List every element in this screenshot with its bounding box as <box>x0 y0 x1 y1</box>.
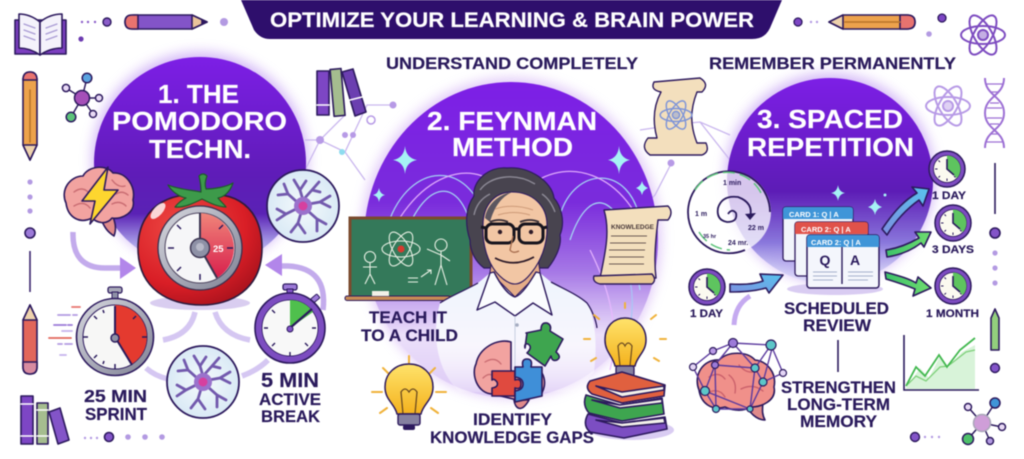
icon: chalkboard <box>345 218 471 300</box>
label: 3 days: 3 DAYS <box>932 244 974 256</box>
arrow: to 1 month <box>885 272 931 296</box>
decorative dots: top right <box>794 14 946 37</box>
label: strengthen long-term memory <box>781 378 896 431</box>
panel: section 3 circle <box>727 78 933 284</box>
icon: 5 minute stopwatch <box>255 284 325 363</box>
icon: flashcards: A <box>850 252 860 268</box>
decorative network lines <box>305 105 730 210</box>
icon: clock 1 day top <box>929 151 965 187</box>
icon: open book <box>15 14 66 55</box>
icon: small green pencil <box>991 309 999 350</box>
section 3 heading: 3. SPACED <box>757 104 903 134</box>
section 1 heading: TECHN. <box>149 134 251 164</box>
label: 5 min active break: ACTIVE <box>259 390 321 409</box>
sparkles <box>831 185 886 215</box>
icon: atom scroll <box>644 78 707 155</box>
icon: green puzzle piece <box>525 323 563 366</box>
arrows: flow into tomato <box>73 232 324 379</box>
icon: flashcards: CARD 2: Q | A <box>811 238 861 247</box>
icon: atom top right <box>961 11 1005 59</box>
label: 5 min active break <box>259 370 321 426</box>
speed lines <box>49 307 80 355</box>
icon: clock 1 month <box>935 268 971 304</box>
icon: flashcards: Q <box>820 252 831 268</box>
label: 1 day top: 1 DAY <box>932 190 967 202</box>
arrow: from 1 day <box>730 274 783 293</box>
label: identify knowledge gaps <box>430 410 594 447</box>
subheading: understand completely: UNDERSTAND COMPLETELY <box>386 54 639 73</box>
icon: tomato timer <box>138 174 262 310</box>
network nodes <box>316 102 684 166</box>
icon: molecule <box>62 73 102 122</box>
decorative dots: bottom left <box>84 432 165 442</box>
label: 1 day left: 1 DAY <box>690 308 724 320</box>
decorative column left <box>25 179 35 292</box>
icon: small red pencil <box>23 305 37 374</box>
label: scheduled review <box>784 299 889 335</box>
section 3 heading: REPETITION <box>747 132 914 162</box>
decorative dots: bottom right <box>910 432 940 442</box>
title: OPTIMIZE YOUR LEARNING & BRAIN POWER <box>270 9 754 32</box>
icon: neuron bottom <box>167 346 239 418</box>
section 1 heading: POMODORO <box>112 106 287 136</box>
label: 5 min active break: 5 MIN <box>261 370 319 392</box>
subheading: remember permanently: REMEMBER PERMANENTLY <box>709 54 957 73</box>
label: strengthen long-term memory: STRENGTHEN <box>781 378 896 397</box>
icon: spiral clock: 1 min <box>723 180 741 187</box>
icon: books centre top <box>317 69 366 116</box>
icon: spiral clock: 24 mr. <box>728 240 748 247</box>
icon: clock 3 days <box>935 205 971 241</box>
label: teach it to a child: TO A CHILD <box>361 326 458 345</box>
icon: clock 1 day left <box>689 269 725 305</box>
icon: knowledge scroll: KNOWLEDGE <box>611 224 654 231</box>
label: scheduled review: SCHEDULED <box>784 299 889 318</box>
decorative column right <box>990 163 1000 372</box>
icon: 25 minute stopwatch <box>76 287 154 376</box>
label: strengthen long-term memory: MEMORY <box>800 412 878 431</box>
icon: flashcards: CARD 1: Q | A <box>789 210 839 219</box>
icon: spiral clock <box>688 171 771 253</box>
chart: growth graph <box>904 335 979 390</box>
icon: spiral clock: 22 m <box>748 225 764 232</box>
icon: knowledge scroll <box>594 206 671 284</box>
arrow: brain to clock <box>734 296 750 325</box>
icon: vertical pencil left <box>23 72 37 160</box>
panel: section 2 circle <box>364 82 658 398</box>
label: 25 min sprint <box>84 386 147 424</box>
label: scheduled review: REVIEW <box>803 316 872 335</box>
clock value: 25 <box>213 244 224 255</box>
icon: light bulb left <box>372 356 446 430</box>
label: 25 min sprint: SPRINT <box>85 404 147 424</box>
icon: books bottom left <box>21 396 69 444</box>
icon: faded atom <box>926 82 970 130</box>
section 3 heading <box>747 104 914 162</box>
label: teach it to a child <box>361 308 458 345</box>
icon: flashcards: CARD 2: Q | A <box>801 225 851 234</box>
figure: Feynman portrait <box>436 168 597 395</box>
panel: circle glows <box>92 52 935 398</box>
icon: spiral clock: 35 hr <box>703 234 717 240</box>
label: teach it to a child: TEACH IT <box>369 308 448 327</box>
icon: molecule bottom right <box>962 398 1006 444</box>
icon: light bulb and books <box>584 303 674 440</box>
label: 5 min active break: BREAK <box>261 407 321 426</box>
section 1 heading: 1. THE <box>158 79 239 109</box>
icon: DNA helix <box>985 78 1004 148</box>
label: strengthen long-term memory: LONG-TERM <box>787 395 890 414</box>
icon: puzzle brain <box>474 341 545 408</box>
header banner <box>241 0 782 39</box>
section 2 heading <box>427 106 597 162</box>
icon: spiral clock: 1 m <box>695 211 707 218</box>
energy field lines and sparkles <box>373 146 650 370</box>
icon: brain with lightning <box>64 167 134 236</box>
decorative dots: top left <box>78 18 228 42</box>
arrow: to 3 days <box>886 232 931 257</box>
icon: pencil top right <box>829 15 915 29</box>
icon: neuron right <box>267 170 339 242</box>
panel: section 1 circle <box>94 57 306 269</box>
label: identify knowledge gaps: KNOWLEDGE GAPS <box>430 428 594 447</box>
icon: horizontal pencil left <box>125 15 207 29</box>
section 2 heading: 2. FEYNMAN <box>427 106 597 136</box>
section 1 heading <box>112 79 287 164</box>
section 2 heading: METHOD <box>452 132 573 162</box>
label: 25 min sprint: 25 MIN <box>84 386 147 406</box>
icon: flashcards <box>783 207 883 295</box>
arrow: to 1 day <box>882 187 929 235</box>
label: 1 month: 1 MONTH <box>926 308 979 320</box>
label: identify knowledge gaps: IDENTIFY <box>473 410 553 429</box>
icon: network brain <box>690 338 786 420</box>
